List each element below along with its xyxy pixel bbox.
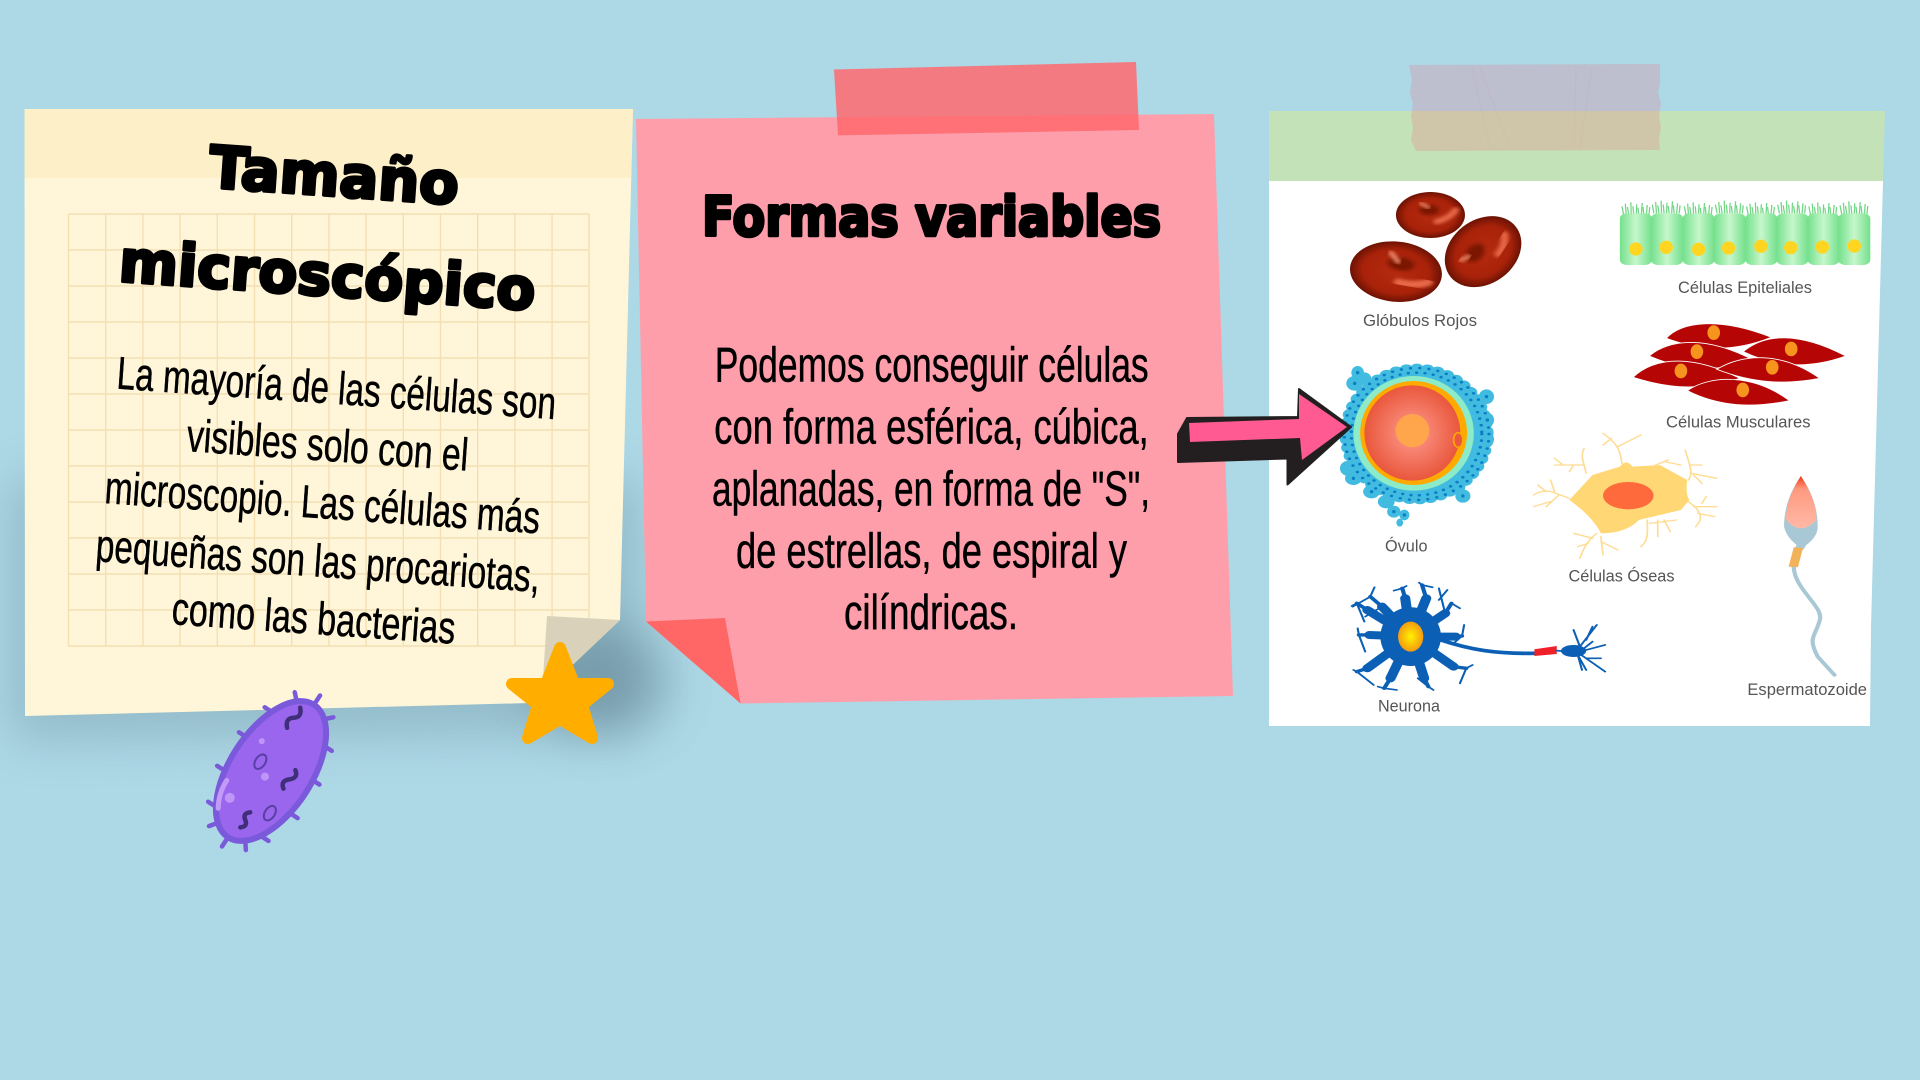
pink note paper: [636, 114, 1233, 704]
panel: tamaño microscópico: [24, 109, 633, 716]
text block: pink note body: con forma esférica, cúbica,: [714, 401, 1149, 455]
label: Óvulo: Óvulo: [1385, 537, 1428, 556]
text block: yellow note body: pequeñas son las procariotas,: [94, 519, 542, 602]
text block: yellow note body: La mayoría de las células son: [115, 347, 558, 429]
panel: tipos de células: [1269, 64, 1885, 726]
text block: yellow note body: [94, 347, 558, 654]
white card: [1269, 181, 1883, 726]
note fold: [646, 618, 741, 704]
heading: Formas variables: Formas variables: [702, 186, 1161, 248]
text block: pink note body: Podemos conseguir células: [715, 339, 1149, 393]
label: Espermatozoide: Espermatozoide: [1747, 681, 1867, 699]
icon: star: [512, 648, 608, 738]
cell: ósea: [1534, 433, 1717, 558]
green band: [1269, 111, 1885, 181]
label: Células Musculares: Células Musculares: [1666, 414, 1810, 432]
arrow: pink pointing at óvulo: [1178, 389, 1351, 484]
heading: Tamaño microscópico: microscópico: [117, 227, 538, 324]
text block: pink note body: aplanadas, en forma de "S",: [712, 462, 1150, 516]
red tape: [834, 62, 1139, 135]
icon: purple bacteria: [182, 669, 360, 873]
cell: epiteliales: [1620, 201, 1870, 265]
label: Células Epiteliales: Células Epiteliales: [1678, 279, 1812, 297]
heading: Tamaño microscópico: [117, 133, 538, 324]
text block: yellow note body: microscopio. Las células más: [103, 461, 542, 543]
cell: musculares: [1633, 324, 1846, 405]
label: Neurona: Neurona: [1378, 698, 1441, 716]
cell: neurona: [1352, 583, 1605, 690]
text block: pink note body: [712, 339, 1150, 640]
cell: óvulo: [1340, 366, 1494, 527]
folded corner: [542, 616, 620, 694]
torn tape: [1409, 64, 1661, 151]
label: Células Óseas: Células Óseas: [1568, 567, 1674, 586]
panel: formas variables: [636, 62, 1233, 704]
shadow: yellow note: [10, 480, 670, 740]
text block: yellow note body: visibles solo con el: [185, 409, 470, 481]
text block: pink note body: de estrellas, de espiral y: [736, 524, 1127, 578]
notebook grid: [68, 214, 589, 646]
label: Glóbulos Rojos: Glóbulos Rojos: [1363, 312, 1477, 330]
yellow note paper: [24, 109, 633, 716]
cell: glóbulos rojos: [1343, 192, 1536, 309]
note top band: [24, 109, 633, 178]
text block: pink note body: cilíndricas.: [844, 586, 1018, 640]
heading: Tamaño microscópico: Tamaño: [207, 133, 461, 218]
text block: yellow note body: como las bacterias: [170, 582, 457, 654]
cell: espermatozoide: [1784, 476, 1835, 675]
